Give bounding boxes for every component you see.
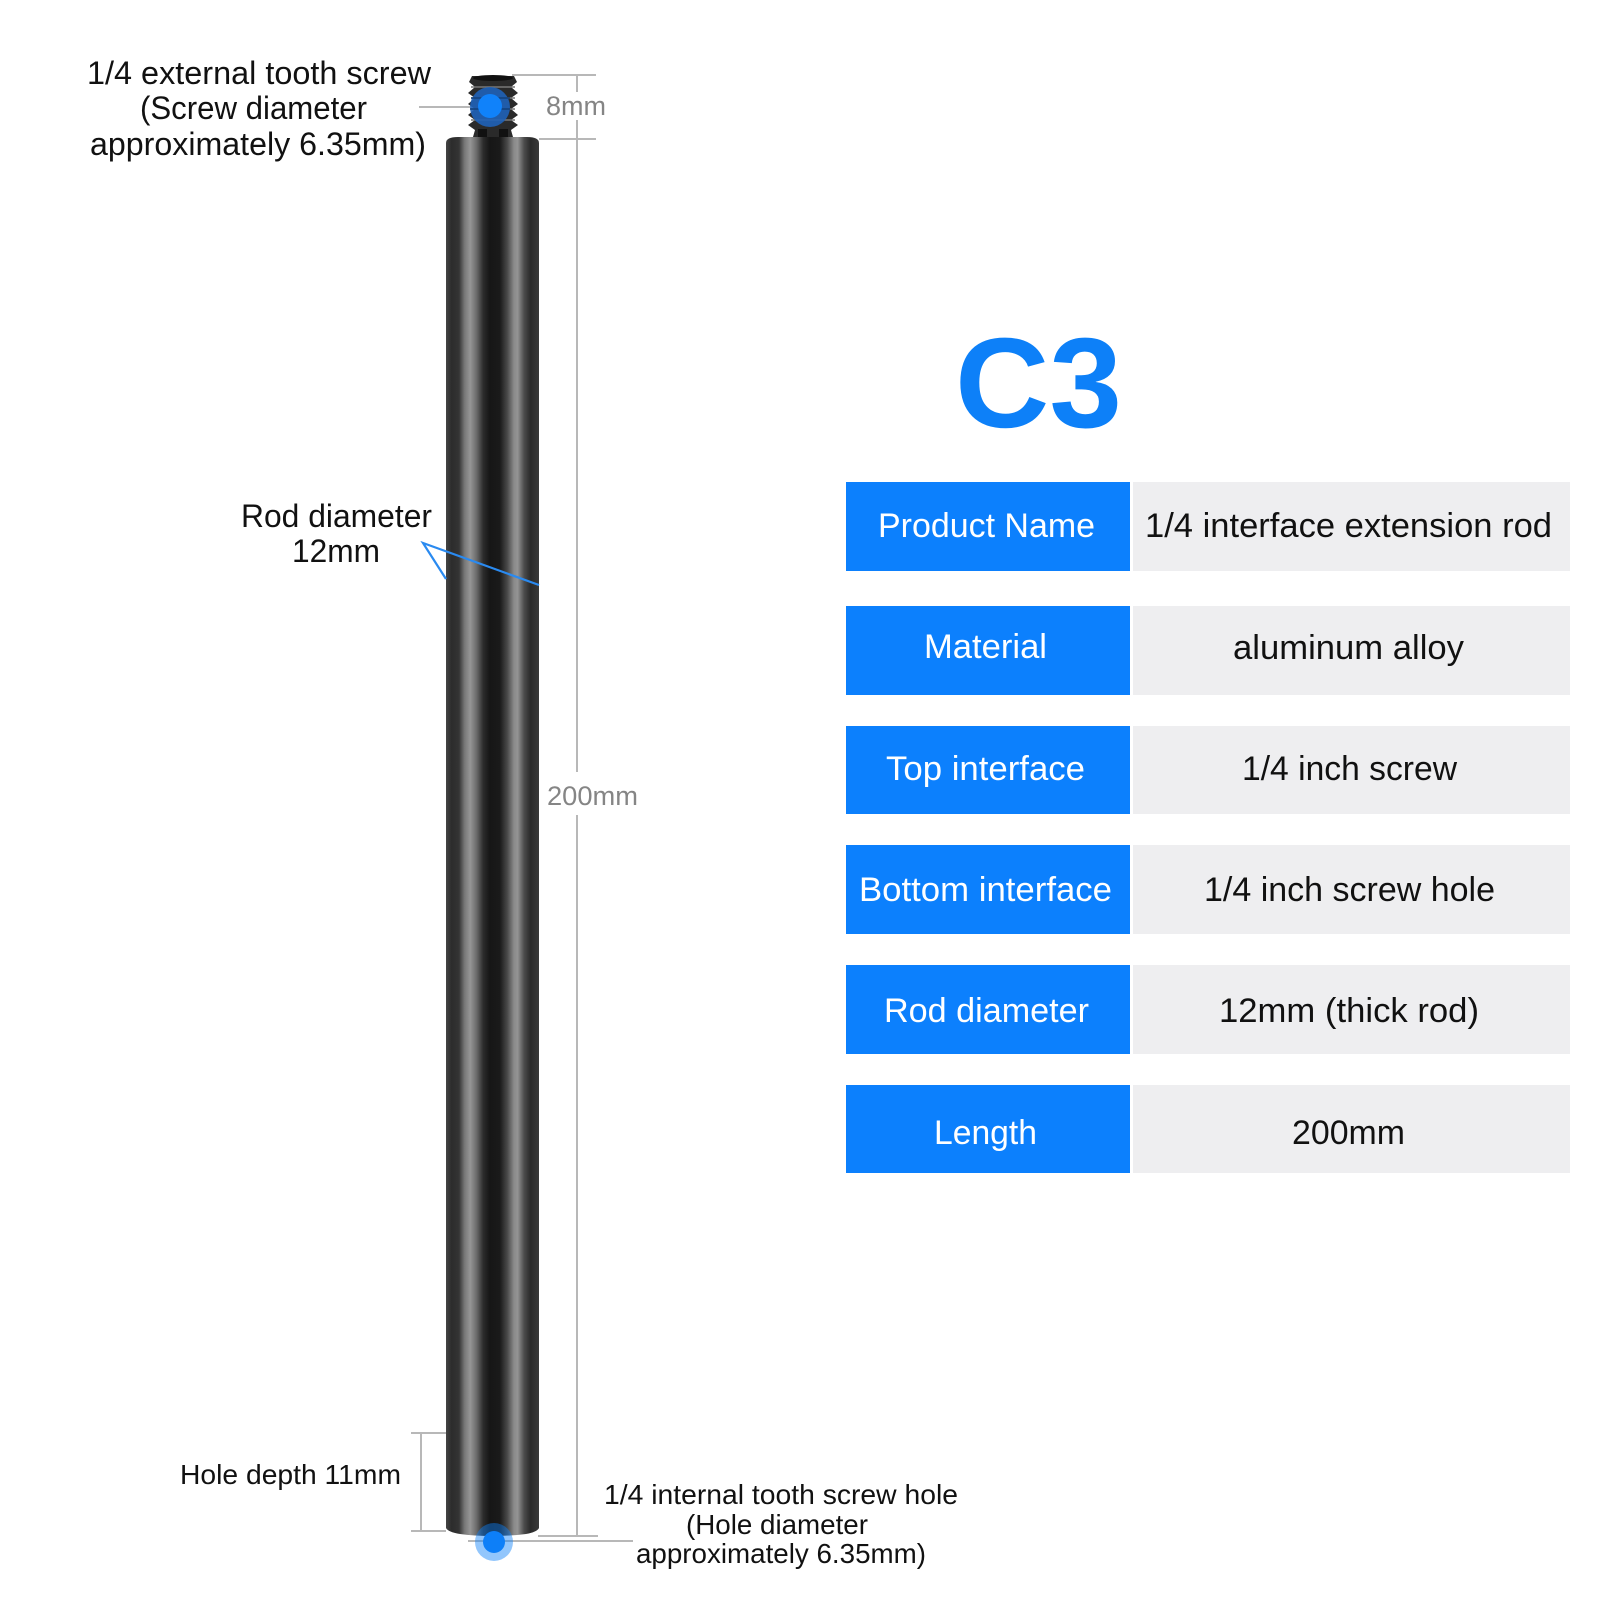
spec table — [846, 482, 1570, 1173]
dimension lines — [411, 75, 633, 1541]
label: internal tooth screw hole: (Hole diameter — [686, 1509, 868, 1540]
row: rod diameter — [846, 965, 1570, 1054]
row: length — [846, 1085, 1570, 1173]
label: rod diameter: Rod diameter — [241, 498, 432, 534]
row: product name: Product Name — [878, 507, 1095, 545]
row: length: 200mm — [1292, 1114, 1405, 1152]
label: rod diameter — [241, 498, 432, 569]
row: top interface — [846, 726, 1570, 814]
label: rod diameter: 12mm — [292, 533, 380, 569]
label: internal tooth screw hole: approximately 6.35mm) — [636, 1538, 926, 1569]
label: hole depth: Hole depth 11mm — [180, 1459, 401, 1490]
label: external tooth screw: approximately 6.35mm) — [90, 126, 426, 162]
icon: bottom hole marker — [475, 1523, 513, 1561]
label: external tooth screw: (Screw diameter — [140, 90, 367, 126]
row: rod diameter: 12mm (thick rod) — [1219, 992, 1479, 1030]
row: material: Material — [924, 628, 1047, 666]
row: bottom interface: 1/4 inch screw hole — [1204, 871, 1495, 909]
label: internal tooth screw hole: 1/4 internal tooth screw hole — [604, 1479, 958, 1510]
label: 8mm: 8mm — [546, 91, 606, 121]
icon: rod body — [446, 137, 539, 1536]
icon: threaded screw tip — [468, 75, 518, 137]
row: rod diameter: Rod diameter — [884, 992, 1089, 1030]
row: top interface: 1/4 inch screw — [1242, 750, 1457, 788]
row: bottom interface: Bottom interface — [859, 871, 1112, 909]
label: 200mm: 200mm — [547, 781, 638, 811]
label: external tooth screw: 1/4 external tooth screw — [87, 55, 432, 91]
row: product name — [846, 482, 1570, 571]
row: material — [846, 606, 1570, 695]
row: material: aluminum alloy — [1233, 629, 1464, 667]
row: product name: 1/4 interface extension rod — [1145, 507, 1552, 545]
row: bottom interface — [846, 845, 1570, 934]
row: length: Length — [934, 1114, 1037, 1152]
rod diameter pointer — [423, 543, 539, 585]
row: top interface: Top interface — [886, 750, 1085, 788]
label: internal tooth screw hole — [604, 1479, 958, 1569]
label: external tooth screw — [87, 55, 432, 162]
title: C3: C3 — [955, 312, 1122, 455]
